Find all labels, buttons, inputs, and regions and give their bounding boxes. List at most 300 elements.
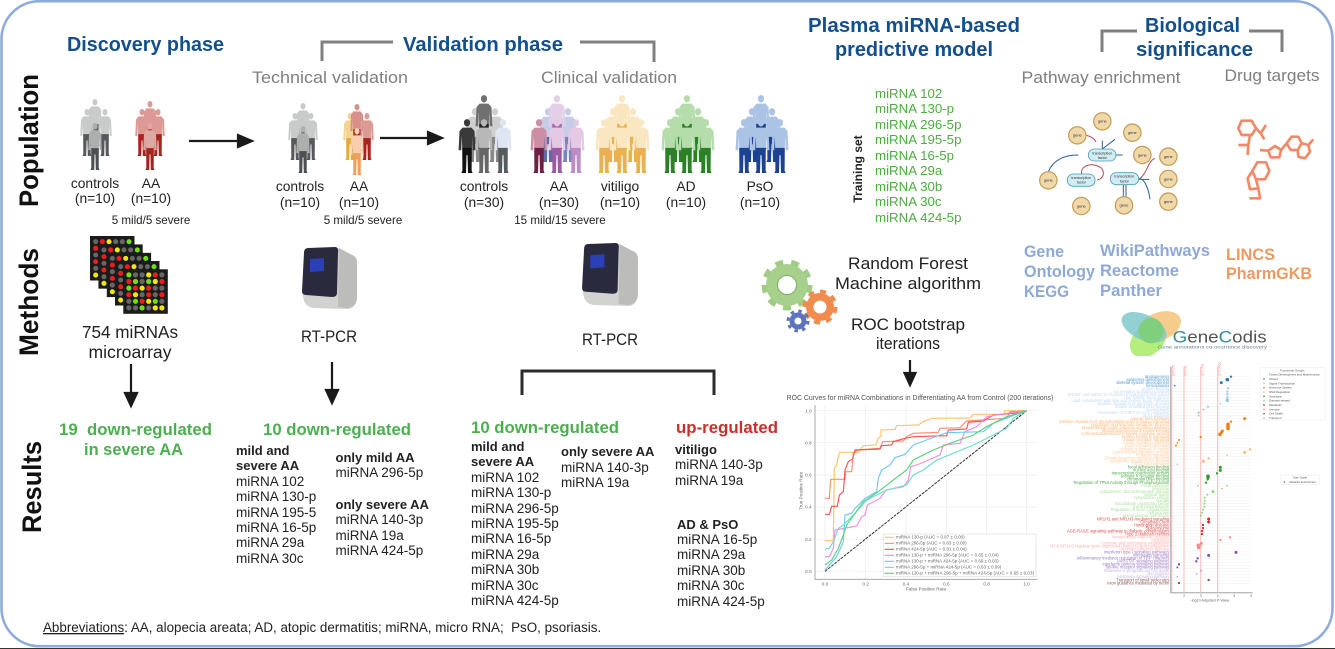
pathway labels: immune: Nonalcoholic fatty liver disease — [1112, 535, 1170, 540]
legend: functional groups: Transport — [1269, 416, 1282, 420]
chart legend: miRNA 296-5p (AUC = 0.83 ± 0.00) — [896, 541, 967, 546]
pathway labels: structural dark: retinoid X receptor binding — [1121, 474, 1170, 479]
pathway labels: disease related: cell junction — [1148, 510, 1170, 515]
results: technical only mild and only severe lists: only mild AA — [336, 450, 415, 465]
text: drug sources — [1226, 246, 1312, 283]
results: AD and PsO list: miRNA 29a — [677, 547, 746, 562]
y axis label: True Positive Rate — [799, 472, 804, 510]
pathway labels: hormone system: protein kinase B signaling — [1122, 434, 1170, 439]
chart legend: miRNA 130-p + miRNA 296-5p (AUC = 0.65 ± 0.04) — [896, 553, 999, 558]
pathway labels: hormone system: 1-phosphatidylinositol-3-kinase regulator activity — [1081, 431, 1170, 436]
people: clinical AA — [531, 95, 584, 173]
results: vitiligo list: vitiligo — [675, 442, 717, 457]
dots: signal transduction — [1197, 387, 1229, 417]
people: technical controls — [288, 103, 318, 173]
pathway labels: hormone system — [1059, 416, 1170, 442]
pathway labels: signal transduction: positive regulation of apoptotic process — [1097, 401, 1169, 406]
icon: gene regulatory network: factor — [1077, 181, 1087, 185]
tick labels — [805, 408, 1030, 586]
icon: gene regulatory network: gene — [1164, 154, 1174, 159]
label: random forest: Random Forest — [848, 254, 968, 273]
labels: clinical groups: (n=30) — [464, 195, 504, 210]
icon: PCR machine, clinical — [582, 243, 638, 306]
pathway labels: final group — [1106, 577, 1170, 585]
dots: final group — [1178, 579, 1210, 584]
pathway labels: immune — [1050, 535, 1170, 552]
icon: microarray stack — [90, 236, 168, 314]
row label: population: Population — [14, 74, 44, 207]
results: technical mild and severe list: miRNA 16-5p — [236, 520, 316, 535]
x axis ticks — [1183, 594, 1252, 598]
training set miRNA list — [875, 86, 961, 225]
tick labels: 0.4 — [903, 581, 910, 586]
training set label: Training set — [851, 135, 865, 203]
results: clinical mild and severe list: miRNA 424-5p — [471, 593, 559, 608]
icon: gene regulatory network: gene — [1073, 133, 1083, 138]
pathway labels: signal transduction: Hair follicle development — [1124, 395, 1170, 400]
legend: size scale — [1281, 475, 1319, 484]
tick labels: 1.0 — [805, 408, 812, 413]
labels: clinical groups — [460, 179, 780, 210]
legend: size scale: Relative Enrichment — [1289, 480, 1316, 484]
label: discovery controls: (n=10) — [75, 191, 115, 206]
x axis ticks: 3 — [1200, 594, 1202, 598]
results: clinical mild and severe list: miRNA 29a — [471, 547, 540, 562]
results: discovery: in severe AA — [84, 441, 183, 459]
pathway labels: DNA regulation: FoxO signaling pathway — [1125, 443, 1170, 448]
tick labels: 0.0 — [805, 569, 812, 574]
pathway labels: signal transduction: Kit receptor signaling pathway — [1114, 389, 1170, 394]
note: clinical severity split: 15 mild/15 severe — [514, 214, 606, 227]
threshold labels: p=0.01 — [1184, 365, 1188, 376]
heading: biological significance: Biological — [1145, 14, 1240, 37]
pathway labels: others: angiogenesis — [1145, 374, 1169, 379]
subheading: drug targets: Drug targets — [1224, 66, 1320, 85]
results: AD and PsO list: miRNA 424-5p — [677, 594, 765, 609]
bracket: clinical RT-PCR to results — [522, 371, 714, 395]
text: pathway sources: WikiPathways — [1100, 242, 1210, 260]
curve: miRNA 130-p — [825, 411, 1027, 541]
label: technical controls: (n=10) — [280, 195, 320, 210]
pathway labels: signal transduction: Inactivation of CSF3 (G-CSF) signaling — [1097, 410, 1170, 415]
icon: gene regulatory network: gene — [1120, 203, 1129, 208]
pathway labels: metabolic: Spliceosome — [1146, 525, 1170, 530]
subheading: clinical validation: Clinical validation — [541, 68, 677, 87]
results: technical mild and severe list: miRNA 30c — [236, 551, 304, 566]
tick labels: 0.4 — [805, 505, 812, 510]
legend: functional groups: Structural — [1269, 394, 1282, 398]
pathway labels: structural dark: focal adhesion binding — [1128, 465, 1170, 470]
results: clinical mild and severe list: miRNA 16-5p — [471, 531, 551, 546]
subheading: technical validation: Technical validation — [252, 68, 408, 87]
results: AD and PsO list: AD & PsO — [677, 517, 738, 532]
pathway labels: disease related — [1100, 483, 1170, 518]
label: technical AA: (n=10) — [339, 195, 379, 210]
pathway labels: DNA regulation: Growth hormone receptor signaling — [1104, 456, 1170, 461]
x axis ticks: 5 — [1233, 594, 1235, 598]
icon: gene regulatory network: transcription — [1092, 151, 1112, 155]
text: pathway sources — [1100, 242, 1210, 300]
label: random forest: Machine algorithm — [835, 274, 981, 293]
subheading: pathway enrichment: Pathway enrichment — [1022, 68, 1181, 87]
label: discovery AA: (n=10) — [131, 191, 171, 206]
threshold labels: p=0.0001 — [1217, 362, 1221, 376]
people: clinical controls — [459, 95, 511, 173]
results: vitiligo list: miRNA 19a — [675, 473, 744, 488]
results: technical mild and severe list: mild and — [236, 443, 290, 458]
pathway labels: DNA regulation — [1104, 440, 1170, 467]
pathway labels: cell death: Toll-like receptor signaling pathway — [1105, 565, 1170, 570]
logo: GeneCodis: Gene annotations co-ocurrence discovery — [1158, 344, 1268, 350]
text: drug sources: LINCS — [1226, 246, 1275, 264]
pathway labels: disease related: Regulation of actin cytoskeleton — [1111, 507, 1170, 512]
results: clinical mild and severe list: miRNA 195-5p — [471, 516, 559, 531]
results: technical only mild and only severe lists: miRNA 140-3p — [336, 512, 423, 527]
x axis label: False Positive Rate — [906, 586, 946, 591]
chart legend: miRNA 130-p + miRNA 424-5p (AUC = 0.69 ± 0.03) — [896, 559, 999, 564]
pathway labels: cell death: Inflammatory mediator regulation of TRP channels — [1077, 556, 1169, 561]
x axis ticks: 2 — [1183, 594, 1185, 598]
label: technical controls: controls — [276, 179, 324, 194]
text: gene ontology sources: Gene — [1024, 243, 1064, 261]
arrow: discovery to technical validation — [189, 135, 252, 147]
dots: others — [1174, 375, 1232, 386]
tick labels: 0.8 — [983, 581, 990, 586]
training set miRNA list: miRNA 16-5p — [875, 148, 954, 163]
training set miRNA list: miRNA 30b — [875, 179, 942, 194]
heading: biological significance: significance — [1136, 38, 1253, 61]
pathway labels: DNA regulation: cellular response to insulin — [1120, 447, 1170, 452]
pathway labels: disease related: Focal adhesion — [1141, 483, 1170, 488]
dots: hormone system — [1175, 417, 1246, 447]
results: technical only mild and only severe lists: miRNA 296-5p — [336, 465, 423, 480]
results: clinical mild and severe list: miRNA 30b — [471, 562, 539, 577]
pathway labels: hormone system: phosphatidylinositol 3-kinase binding — [1102, 428, 1170, 433]
icon: gene regulatory network: gene — [1138, 152, 1148, 157]
logo: GeneCodis — [1122, 311, 1267, 356]
label: microarray method — [82, 322, 178, 362]
legend: functional groups: Tissue Development and Maintenance — [1269, 373, 1320, 377]
pathway labels: structural dark: Regulation of TP53 Activity through Phosphorylation — [1074, 480, 1170, 485]
labels: clinical groups: AA — [550, 179, 569, 194]
heading: discovery phase: Discovery phase — [67, 33, 224, 56]
results: technical mild and severe list — [236, 443, 316, 566]
pathway labels: final group: Transport of small molecules — [1116, 577, 1169, 582]
results: technical mild and severe list: severe AA — [236, 458, 300, 473]
results: technical only mild and only severe lists: miRNA 424-5p — [336, 543, 423, 558]
pathway labels: cell death: Interferon type I signaling pathways — [1104, 550, 1169, 555]
results: AD and PsO list: miRNA 16-5p — [677, 532, 757, 547]
text: pathway sources: Reactome — [1100, 262, 1179, 280]
people: clinical AD — [662, 95, 714, 173]
chart legend: miRNA 424-5p (AUC = 0.81 ± 0.04) — [896, 547, 967, 552]
pathway labels: disease related: cytoplasmic vesicle — [1134, 495, 1170, 500]
curve: miRNA 130-p + miRNA 424-5p — [825, 411, 1027, 570]
pathway labels: hormone system: regulation of phosphate metabolic process — [1091, 422, 1169, 427]
pathway labels: DNA regulation: TGF-beta signaling — [1134, 462, 1170, 467]
threshold labels: p=0.001 — [1200, 363, 1204, 376]
results: clinical mild and severe list: mild and — [471, 439, 525, 454]
icon: drug molecules — [1238, 121, 1313, 198]
chart: enrichment dot plot — [1050, 362, 1325, 603]
pathway labels: cell death — [1077, 550, 1170, 570]
training set miRNA list: miRNA 30c — [875, 194, 942, 209]
text: drug sources: PharmGKB — [1226, 265, 1312, 283]
pathway labels: disease related: nuclear speck — [1144, 492, 1170, 497]
pathway labels: metabolic: Huntington disease — [1134, 522, 1170, 527]
legend: functional groups: Immune — [1269, 407, 1280, 411]
pathway labels: signal transduction: double-stranded DNA binding — [1115, 404, 1170, 409]
legend: functional groups: Disease-related — [1269, 399, 1290, 403]
heading: plasma miRNA-based predictive model: predictive model — [835, 38, 993, 61]
results: technical mild and severe list: miRNA 29a — [236, 535, 305, 550]
people: clinical vitiligo — [596, 95, 649, 173]
legend: functional groups: Signal Transduction — [1269, 381, 1296, 385]
labels: clinical groups: (n=10) — [740, 195, 780, 210]
heading: biological significance — [1102, 14, 1282, 61]
icon: gene regulatory network: gene — [1164, 199, 1174, 204]
training set miRNA list: miRNA 102 — [875, 86, 942, 101]
results: discovery — [59, 421, 212, 459]
pathway labels: signal transduction: SREBF and miR33 in cholesterol and lipid homeostasis — [1067, 392, 1169, 397]
pathway labels: immune: H2 & NR1H3 regulate gene expression linked to lipid metabolism — [1050, 544, 1170, 549]
pathway labels: hormone system: insulin receptor signaling — [1124, 437, 1170, 442]
pathway labels: DNA regulation: Insulin-like growth factor binding — [1110, 459, 1170, 464]
label: RT-PCR, clinical: RT-PCR — [582, 331, 638, 349]
pathway labels: metabolic: Type 2 diabetes mellitus — [1125, 531, 1169, 536]
legend: functional groups: DNA Regulation — [1269, 390, 1291, 394]
pathway labels: cell death: JAK/STAT signaling pathway — [1116, 559, 1170, 564]
pathway labels: transport — [1104, 568, 1170, 579]
pathway labels: others: skeletal system development — [1116, 380, 1170, 385]
results: clinical only severe list: miRNA 19a — [561, 475, 630, 490]
label: ROC bootstrap: iterations — [876, 334, 940, 353]
results: clinical mild and severe list: miRNA 30c — [471, 578, 539, 593]
labels: clinical groups: controls — [460, 179, 508, 194]
icon: gene regulatory network: transcription — [1114, 175, 1134, 179]
results: vitiligo list — [675, 442, 763, 488]
results: clinical only severe list: miRNA 140-3p — [561, 460, 649, 475]
label: discovery controls: controls — [71, 176, 119, 191]
people: discovery controls — [80, 99, 112, 170]
text: gene ontology sources: KEGG — [1024, 283, 1069, 301]
bottom edge line — [0, 648, 1335, 649]
pathway labels: disease related: spindle — [1156, 498, 1170, 503]
icon: gene regulatory network: gene — [1098, 119, 1108, 124]
results: technical mild and severe list: miRNA 102 — [236, 474, 304, 489]
legend: functional groups: Hormone System — [1269, 386, 1293, 390]
training set miRNA list: miRNA 29a — [875, 163, 943, 178]
pathway labels: cell death: Interleukin signaling — [1133, 553, 1170, 558]
chart legend: miRNA 296-5p + miRNA 424-5p (AUC = 0.63 ± 0.09) — [896, 565, 1002, 570]
dots: metabolic — [1201, 517, 1210, 535]
pathway labels: hormone system: positive regulation of phosphatidylinositol 3-kinase signaling — [1059, 419, 1170, 424]
text: gene ontology sources: Ontology — [1024, 263, 1096, 281]
label: technical controls — [276, 179, 324, 210]
row label: methods: Methods — [14, 248, 44, 356]
chart legend: miRNA 130-p + miRNA 296-5p + miRNA 424-5p (AUC = 0.65 ± 0.03) — [896, 571, 1035, 576]
legend: size scale: Size Scale — [1293, 475, 1307, 479]
curve: miRNA 424-5p — [825, 411, 1027, 514]
labels: clinical groups: vitiligo — [601, 179, 639, 194]
pathway labels: disease related: cytoplasmic ribonucleoprotein granule — [1100, 489, 1170, 494]
icon: gene regulatory network: gene — [1164, 176, 1174, 181]
pathway labels: transport: Diseases of programmed cell death — [1104, 568, 1170, 573]
text: pathway sources: Panther — [1100, 282, 1163, 300]
label: ROC bootstrap: ROC bootstrap — [851, 315, 965, 334]
x axis ticks: 6 — [1250, 594, 1252, 598]
results: clinical mild and severe list: miRNA 102 — [471, 470, 539, 485]
pathway labels: signal transduction — [1067, 386, 1170, 418]
results: vitiligo list: miRNA 140-3p — [675, 457, 763, 472]
pathway labels: metabolic: NR1H2 and NR1H3-mediated signaling — [1097, 516, 1170, 521]
results: technical only mild and only severe lists: only severe AA — [336, 497, 430, 512]
arrow: technical RT-PCR to results — [326, 362, 338, 403]
label: discovery AA — [131, 176, 171, 206]
pathway labels: immune: Cysteine and methionine metabolism — [1101, 541, 1170, 546]
note: discovery severity split: 5 mild/5 severe — [112, 214, 190, 227]
results: clinical only severe list: only severe AA — [561, 444, 655, 459]
threshold labels: p=0.05 — [1171, 365, 1175, 376]
icon: gene regulatory network — [1040, 113, 1177, 215]
results: technical only mild and only severe lists — [336, 450, 430, 558]
label: ROC bootstrap — [851, 315, 965, 353]
legend: functional groups: Metabolic — [1269, 403, 1282, 407]
label: random forest — [835, 254, 981, 293]
label: microarray method: 754 miRNAs — [82, 322, 178, 342]
pathway labels: hormone system: phosphatidylinositol 3-kinase signaling pathway — [1082, 425, 1170, 430]
labels: clinical groups: (n=10) — [600, 195, 640, 210]
icon: gene regulatory network: gene — [1044, 178, 1054, 183]
icon: gears — [764, 262, 836, 331]
label: technical AA: AA — [350, 179, 369, 194]
training set miRNA list: miRNA 296-5p — [875, 117, 961, 132]
results: AD and PsO list — [677, 517, 765, 609]
curve: miRNA 296-5p — [825, 411, 1027, 498]
pathway labels: metabolic: AGE-RAGE signaling pathway in diabetic complications — [1067, 528, 1169, 533]
pathway labels: immune: Alcoholic fatty liver disease — [1119, 547, 1170, 552]
curve: three miRNA combination — [825, 411, 1027, 565]
pathway labels: DNA regulation: Leptin-insulin signaling overlap — [1112, 450, 1170, 455]
row label: results: Results — [17, 441, 47, 533]
tick labels: 0.6 — [943, 581, 950, 586]
pathway labels: metabolic — [1067, 516, 1170, 536]
pathway labels: hormone system: mature beta pathway — [1131, 416, 1170, 421]
curve: miRNA 296-5p + miRNA 424-5p — [825, 411, 1027, 549]
icon: gene regulatory network: factor — [1120, 179, 1130, 183]
labels: clinical groups: AD — [676, 179, 696, 194]
training set miRNA list: miRNA 424-5p — [875, 210, 961, 225]
pathway labels: structural dark — [1074, 465, 1170, 485]
results: technical mild and severe list: miRNA 195-5 — [236, 505, 316, 520]
threshold labels — [1171, 362, 1221, 376]
text: gene ontology sources — [1024, 243, 1096, 301]
results: AD and PsO list: miRNA 30b — [677, 563, 745, 578]
results: clinical up-regulated heading: up-regulated — [676, 419, 778, 437]
pathway labels: others: epidermis development — [1126, 377, 1170, 382]
pathway labels: DNA regulation: Prolactin signaling — [1136, 453, 1170, 458]
icon: PCR machine, technical — [302, 247, 357, 309]
pathway labels: disease related: apical plasma membrane — [1123, 513, 1170, 518]
label: discovery controls — [71, 176, 119, 206]
chart title: ROC Curves for miRNA Combinations in Differentiating AA from Control (200 iterations) — [787, 394, 1053, 402]
results: clinical mild and severe list — [471, 439, 559, 608]
pathway labels: disease related: trans-Golgi network — [1133, 504, 1170, 509]
dots: cell death — [1176, 551, 1237, 568]
pathway labels: structural dark: chromatin DNA binding — [1127, 477, 1170, 482]
label: RT-PCR, technical: RT-PCR — [301, 328, 357, 346]
results: clinical down-regulated heading: 10 down-regulated — [471, 419, 619, 437]
note: technical severity split: 5 mild/5 severe — [324, 214, 402, 227]
pathway labels: others — [1116, 374, 1170, 388]
labels: clinical groups: (n=30) — [539, 195, 579, 210]
x axis ticks: 4 — [1217, 594, 1219, 598]
results: technical only mild and only severe lists: miRNA 19a — [336, 528, 404, 543]
label: technical AA — [339, 179, 379, 210]
heading: validation phase: Validation phase — [403, 33, 563, 56]
tick labels: 0.0 — [822, 581, 829, 586]
pathway labels: signal transduction: DLK1 pathway — [1142, 413, 1170, 418]
training set miRNA list: miRNA 130-p — [875, 101, 954, 116]
pathway labels: transport: Apoptosis signaling pathway — [1117, 574, 1170, 579]
tick labels: 0.6 — [805, 473, 812, 478]
dots: DNA regulation — [1176, 448, 1251, 465]
pathway labels: metabolic: Circadian Clock — [1140, 519, 1170, 524]
pathway labels: final group: Axon guidance mediated by netrin — [1106, 580, 1170, 585]
results: AD and PsO list: miRNA 30c — [677, 578, 745, 593]
curve: miRNA 130-p + miRNA 296-5p — [825, 411, 1027, 557]
dots: disease related — [1197, 485, 1228, 517]
pathway labels: disease related: microtubule organizing center — [1115, 501, 1170, 506]
legend: functional groups: Cell Death — [1269, 412, 1283, 416]
results: technical mild and severe list: miRNA 130-p — [236, 489, 316, 504]
logo: GeneCodis: GeneCodis — [1173, 329, 1267, 347]
legend: functional groups: Others — [1269, 377, 1278, 381]
pathway labels: disease related: lysosome — [1152, 486, 1170, 491]
pathway labels: signal transduction: protein binding — [1142, 386, 1170, 391]
dots: structural — [1205, 466, 1222, 484]
pathway labels: others: hemopoiesis — [1146, 383, 1169, 388]
icon: gene regulatory network: gene — [1128, 130, 1138, 135]
results: clinical mild and severe list: severe AA — [471, 454, 535, 469]
icon: gene regulatory network: transcription — [1071, 176, 1091, 180]
results: discovery: 19 down-regulated — [59, 421, 212, 439]
tick labels: 0.2 — [805, 537, 812, 542]
dots: immune — [1196, 536, 1231, 549]
heading: plasma miRNA-based predictive model: Plasma miRNA-based — [808, 14, 1020, 37]
pathway labels: signal transduction: nucleoplasm — [1146, 407, 1170, 412]
tick labels: 0.2 — [862, 581, 869, 586]
training set miRNA list: miRNA 195-5p — [875, 132, 961, 147]
chart legend — [883, 534, 1036, 577]
results: clinical mild and severe list: miRNA 296-5p — [471, 501, 559, 516]
abbreviations: Abbreviations: AA, alopecia areata; AD, atopic dermatitis; miRNA, micro RNA; PsO, psoriasis. — [43, 620, 601, 635]
pathway labels: structural dark: transcription coactivator activity — [1112, 471, 1170, 476]
pathway labels: cell death: Interferon gamma signaling pathway — [1102, 562, 1170, 567]
chart: ROC curves — [787, 394, 1053, 591]
label: discovery AA: AA — [142, 176, 161, 191]
labels: clinical groups: PsO — [747, 179, 774, 194]
pathway labels: DNA regulation: insulin signaling pathway — [1123, 440, 1170, 445]
dots: transport — [1176, 570, 1202, 577]
results: clinical mild and severe list: miRNA 130-p — [471, 485, 551, 500]
arrow: to ROC chart — [904, 360, 916, 385]
legend: functional groups — [1260, 368, 1325, 420]
results: technical heading: 10 down-regulated — [263, 421, 411, 439]
people: discovery AA — [135, 101, 165, 170]
heading: validation phase — [322, 33, 654, 62]
tick labels: 1.0 — [1023, 581, 1030, 586]
